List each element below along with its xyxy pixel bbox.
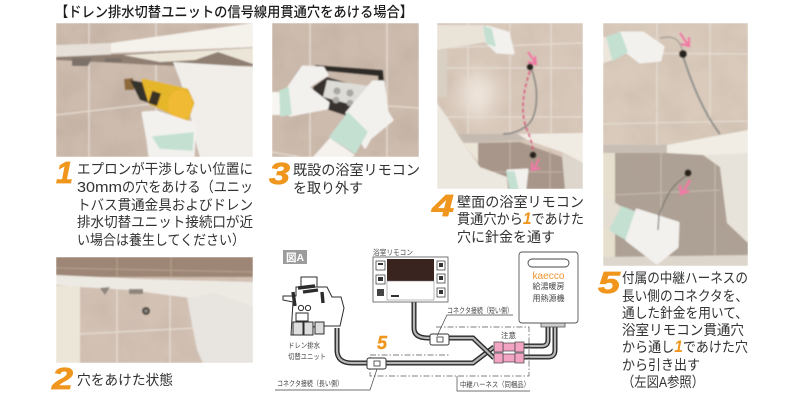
step 2 text: 穴をあけた状態 [77, 372, 173, 389]
step 5 text: から通し1であけた穴 [622, 337, 748, 356]
step 1 text: 排水切替ユニット接続口が近 [77, 214, 253, 231]
chart: figure A wiring diagram [275, 248, 578, 391]
step 3 text [293, 162, 420, 197]
step 4 text: 貫通穴から1であけた [457, 209, 584, 228]
step 5 text: （左図A参照） [622, 374, 704, 391]
callout: relay harness: 中継ハーネス（同梱品） [460, 380, 530, 389]
step 5 text [622, 270, 748, 391]
step 2 number: 2 [51, 361, 73, 396]
label: bath remote: 浴室リモコン [373, 248, 413, 257]
step 5 text: 付属の中継ハーネスの [622, 270, 748, 287]
water heater: 用熱源機 [532, 293, 564, 303]
step 1 text: の穴をあける（ユニッ [122, 179, 253, 196]
step 1 text: い場合は養生してください） [77, 231, 245, 249]
panel: step 5 photo, pulling harness [603, 23, 748, 266]
label: drain unit: ドレン排水 [288, 341, 321, 350]
figure A tag: 図A [286, 252, 304, 264]
harness dash-dot boundary [370, 327, 529, 376]
step 3 text: を取り外す [293, 180, 363, 197]
step 1 text [77, 161, 253, 249]
step 5 text: 通した針金を用いて、 [622, 305, 748, 322]
water heater: 給湯暖房 [532, 281, 564, 291]
step 4 text [457, 194, 584, 246]
water heater: kaecco [532, 271, 565, 282]
step 1 text: エプロンが干渉しない位置に [77, 161, 253, 178]
step 3 number: 3 [269, 156, 290, 191]
label: drain unit: 切替ユニット [288, 352, 326, 361]
label: drain unit [288, 341, 326, 361]
figure A tag [283, 250, 307, 264]
drain switching unit [283, 277, 344, 335]
step 1 text: トバス貫通金具およびドレン [77, 197, 253, 214]
step 4 text: 穴に針金を通す [457, 229, 555, 246]
bath remote diagram [373, 257, 448, 302]
step 5 marker: 5 [377, 333, 388, 353]
step 1 number: 1 [56, 155, 73, 190]
pink protective tape [494, 342, 524, 363]
panel: step 4 photo, threading wire [437, 23, 583, 189]
water heater [519, 252, 578, 327]
callout: connector long side: コネクタ接続（長い側） [277, 379, 343, 388]
step 4 text: 壁面の浴室リモコン [457, 194, 584, 211]
connector short side [430, 334, 449, 345]
cables [337, 302, 555, 363]
callout: connector short side: コネクタ接続（短い側） [447, 306, 513, 315]
step 5 text: から引き出す [622, 357, 700, 374]
panel: step 3 photo, removing remote [272, 23, 419, 157]
step 5 text: 長い側のコネクタを、 [622, 288, 748, 305]
step 4 number: 4 [431, 188, 454, 223]
callout: relay harness [457, 376, 530, 391]
connector long side [367, 358, 386, 369]
label: note over tape: 注意 [501, 331, 517, 340]
title: 【ドレン排水切替ユニットの信号線用貫通穴をあける場合】 [55, 3, 413, 21]
step 5 number: 5 [598, 265, 621, 300]
step 1 text: 30mm [77, 180, 122, 196]
step 5 text: 浴室リモコン貫通穴 [622, 322, 744, 339]
callout: connector long side [275, 369, 377, 390]
panel: step 2 photo, finished hole [56, 257, 253, 363]
panel: step 1 photo, drilling the hole [56, 23, 253, 157]
step 3 text: 既設の浴室リモコン [293, 162, 420, 179]
callout: connector short side [437, 306, 513, 336]
